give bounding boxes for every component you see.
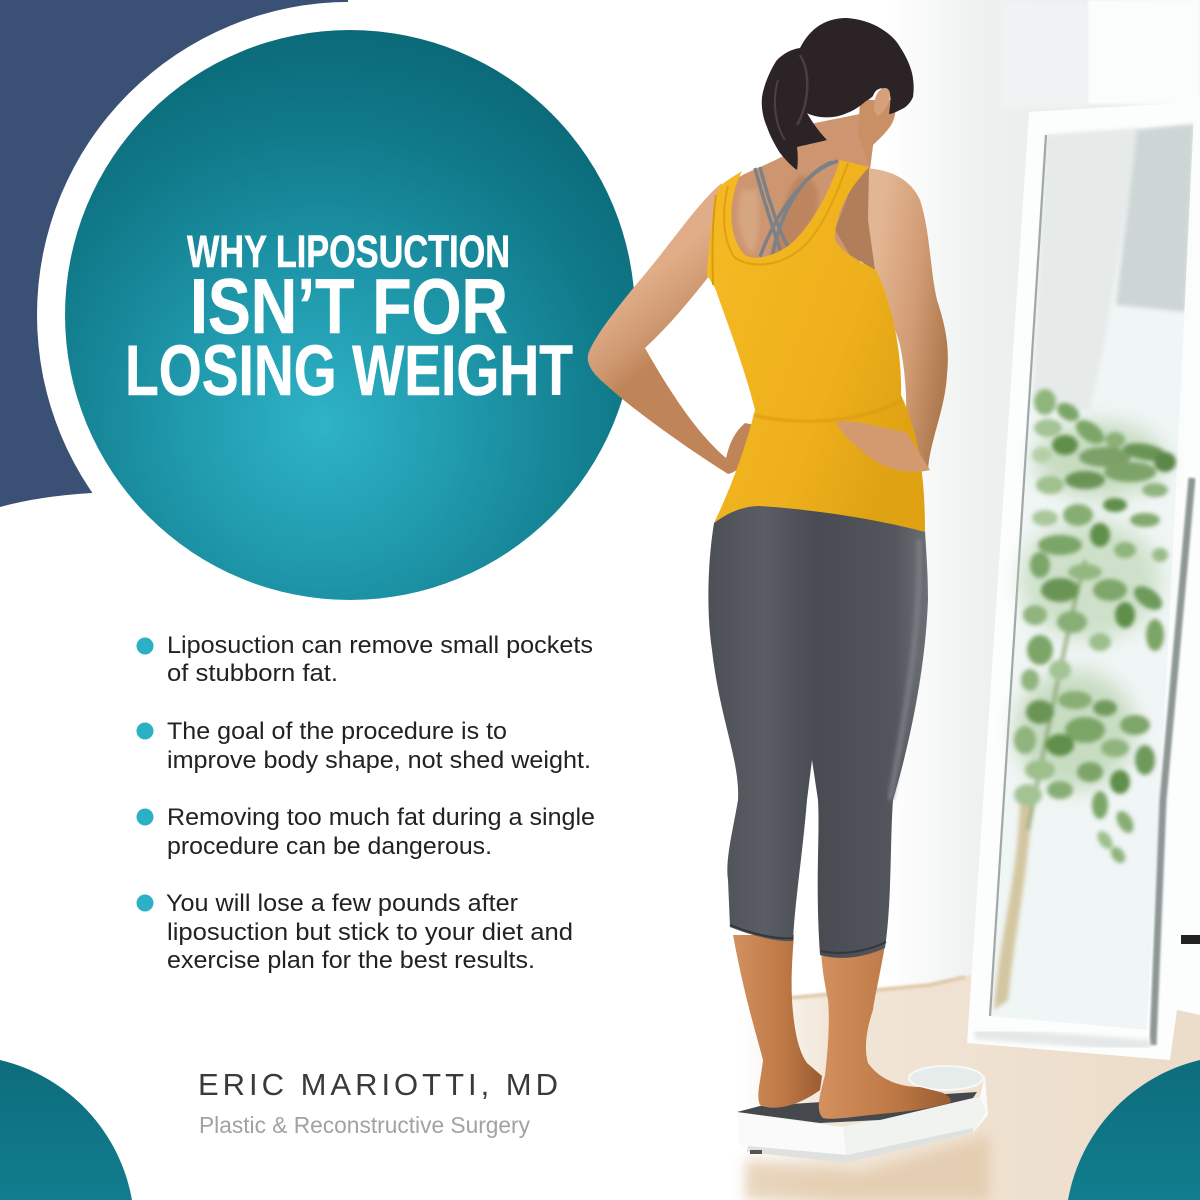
navy shape top left [0, 0, 348, 507]
bullet 4: exercise plan for the best results. [167, 947, 535, 974]
left arm [588, 183, 768, 474]
corner shape bottom right [1068, 1060, 1200, 1200]
teal title circle [65, 30, 635, 600]
bullet 1: of stubborn fat. [167, 660, 338, 687]
logo: Plastic & Reconstructive Surgery [199, 1112, 530, 1138]
bullet 3 [136, 804, 595, 860]
bullet 1: Liposuction can remove small pockets [167, 632, 593, 659]
background photo: room [738, 0, 1200, 1200]
bullet 3: Removing too much fat during a single [167, 804, 595, 831]
mirror glass [991, 270, 1184, 1030]
logo [200, 1074, 556, 1138]
strap: crossed bra [755, 161, 838, 257]
title: WHY LIPOSUCTION [187, 226, 510, 277]
logo: ERIC MARIOTTI, MD [198, 1067, 558, 1102]
legs below leggings [733, 935, 822, 1108]
leggings [708, 498, 928, 958]
right arm [863, 168, 948, 468]
corner shape bottom left [0, 1060, 132, 1200]
title [128, 235, 573, 396]
neck and back skin [731, 114, 874, 262]
mirror [967, 102, 1200, 1060]
hand on hip [836, 421, 930, 472]
mirror frame [967, 102, 1200, 1060]
bullet 4: liposuction but stick to your diet and [167, 919, 573, 946]
face [858, 100, 896, 168]
bullet 2: improve body shape, not shed weight. [167, 747, 591, 774]
tank top [707, 160, 925, 532]
hair [762, 18, 914, 170]
bullet 2 [136, 718, 591, 774]
white ring [37, 2, 348, 493]
plant reflection [994, 389, 1176, 1010]
bullet 4: You will lose a few pounds after [166, 890, 518, 917]
bullet 4 [136, 890, 573, 974]
scale [737, 1066, 988, 1163]
bullet 1 [136, 636, 592, 681]
bullet list [136, 632, 595, 974]
woman on scale [588, 18, 988, 1163]
title: ISN’T FOR [190, 262, 508, 350]
bullet 2: The goal of the procedure is to [167, 718, 507, 745]
ear [874, 88, 890, 116]
bullet 3: procedure can be dangerous. [167, 833, 492, 860]
title: LOSING WEIGHT [125, 332, 573, 411]
